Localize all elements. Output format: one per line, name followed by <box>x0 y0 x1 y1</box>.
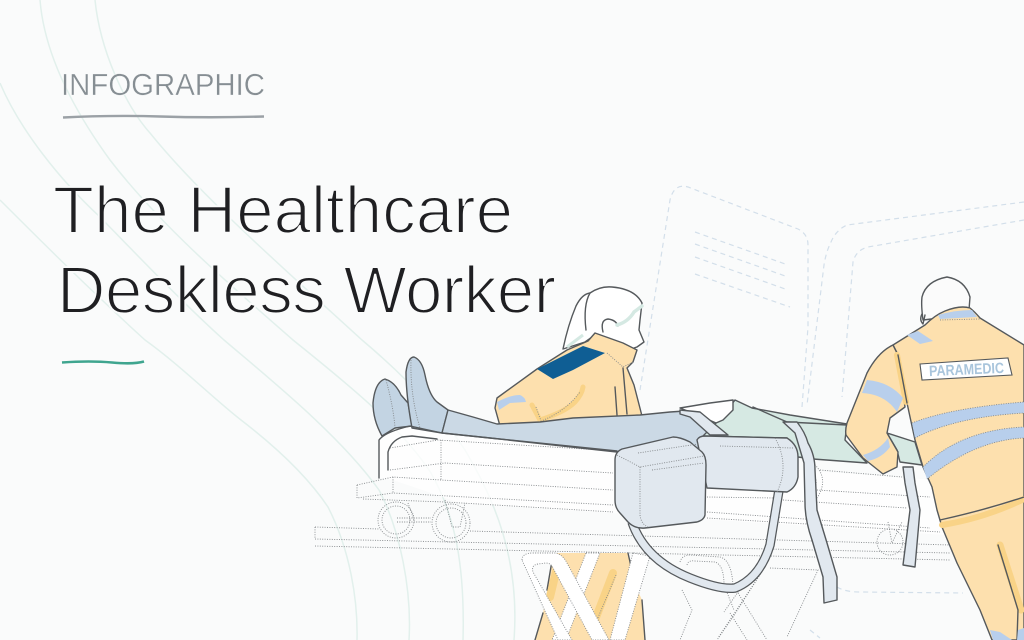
back reflective stripe lower <box>923 427 1024 479</box>
seated paramedic, upper body <box>495 287 644 426</box>
seam highlight <box>897 355 906 402</box>
jacket and trousers <box>893 307 1024 640</box>
back reflective stripe upper <box>912 402 1024 438</box>
title <box>53 173 556 328</box>
stretcher mattress body <box>379 426 945 535</box>
patient sheet, green <box>703 400 922 465</box>
scissor lift frame, right, dotted <box>680 555 818 640</box>
sleeve stripe <box>497 395 526 410</box>
chest strap <box>680 410 728 435</box>
sleeve stripes <box>862 380 903 412</box>
leg seam <box>1000 545 1021 610</box>
shoulder patch <box>907 331 933 344</box>
title: The Healthcare <box>53 173 513 248</box>
standing paramedic <box>846 277 1024 640</box>
forearm stripe <box>863 438 890 461</box>
stretcher head rail, dark outline <box>379 426 617 478</box>
title: Deskless Worker <box>57 253 556 328</box>
lower U-shaped strap <box>632 490 779 588</box>
patient foot, left <box>373 379 412 436</box>
stretcher wheels, dotted <box>378 500 903 555</box>
stripe stitching <box>912 319 1024 479</box>
foot stitching <box>386 360 420 428</box>
white pillow under hands <box>680 400 733 423</box>
ambulance doors, dashed background <box>640 186 1024 638</box>
scissor lift frame, left <box>522 553 650 640</box>
hanging strap, right <box>903 467 920 567</box>
patient foot, right <box>406 357 448 433</box>
seated paramedic, legs behind scissor frame <box>535 553 645 640</box>
jacket <box>495 333 642 426</box>
collar stripe <box>938 310 977 319</box>
patient bolster cushion <box>697 436 798 492</box>
jacket folds <box>532 387 583 420</box>
eyebrow label: INFOGRAPHIC: INFOGRAPHIC <box>61 67 265 102</box>
waist line <box>942 499 1024 525</box>
hair and head <box>563 287 644 350</box>
eyebrow underline <box>63 116 264 118</box>
head <box>922 277 970 320</box>
hanging strap, centre <box>783 422 837 603</box>
left arm <box>846 345 905 474</box>
trouser cuff stripes <box>990 628 1024 640</box>
patient front cushion block <box>615 437 706 528</box>
title accent rule <box>62 362 144 363</box>
PARAMEDIC badge: PARAMEDIC <box>929 360 1005 380</box>
shoulder patch <box>537 346 605 379</box>
patient trousers <box>442 410 720 452</box>
stretcher frame, dotted <box>315 440 950 560</box>
